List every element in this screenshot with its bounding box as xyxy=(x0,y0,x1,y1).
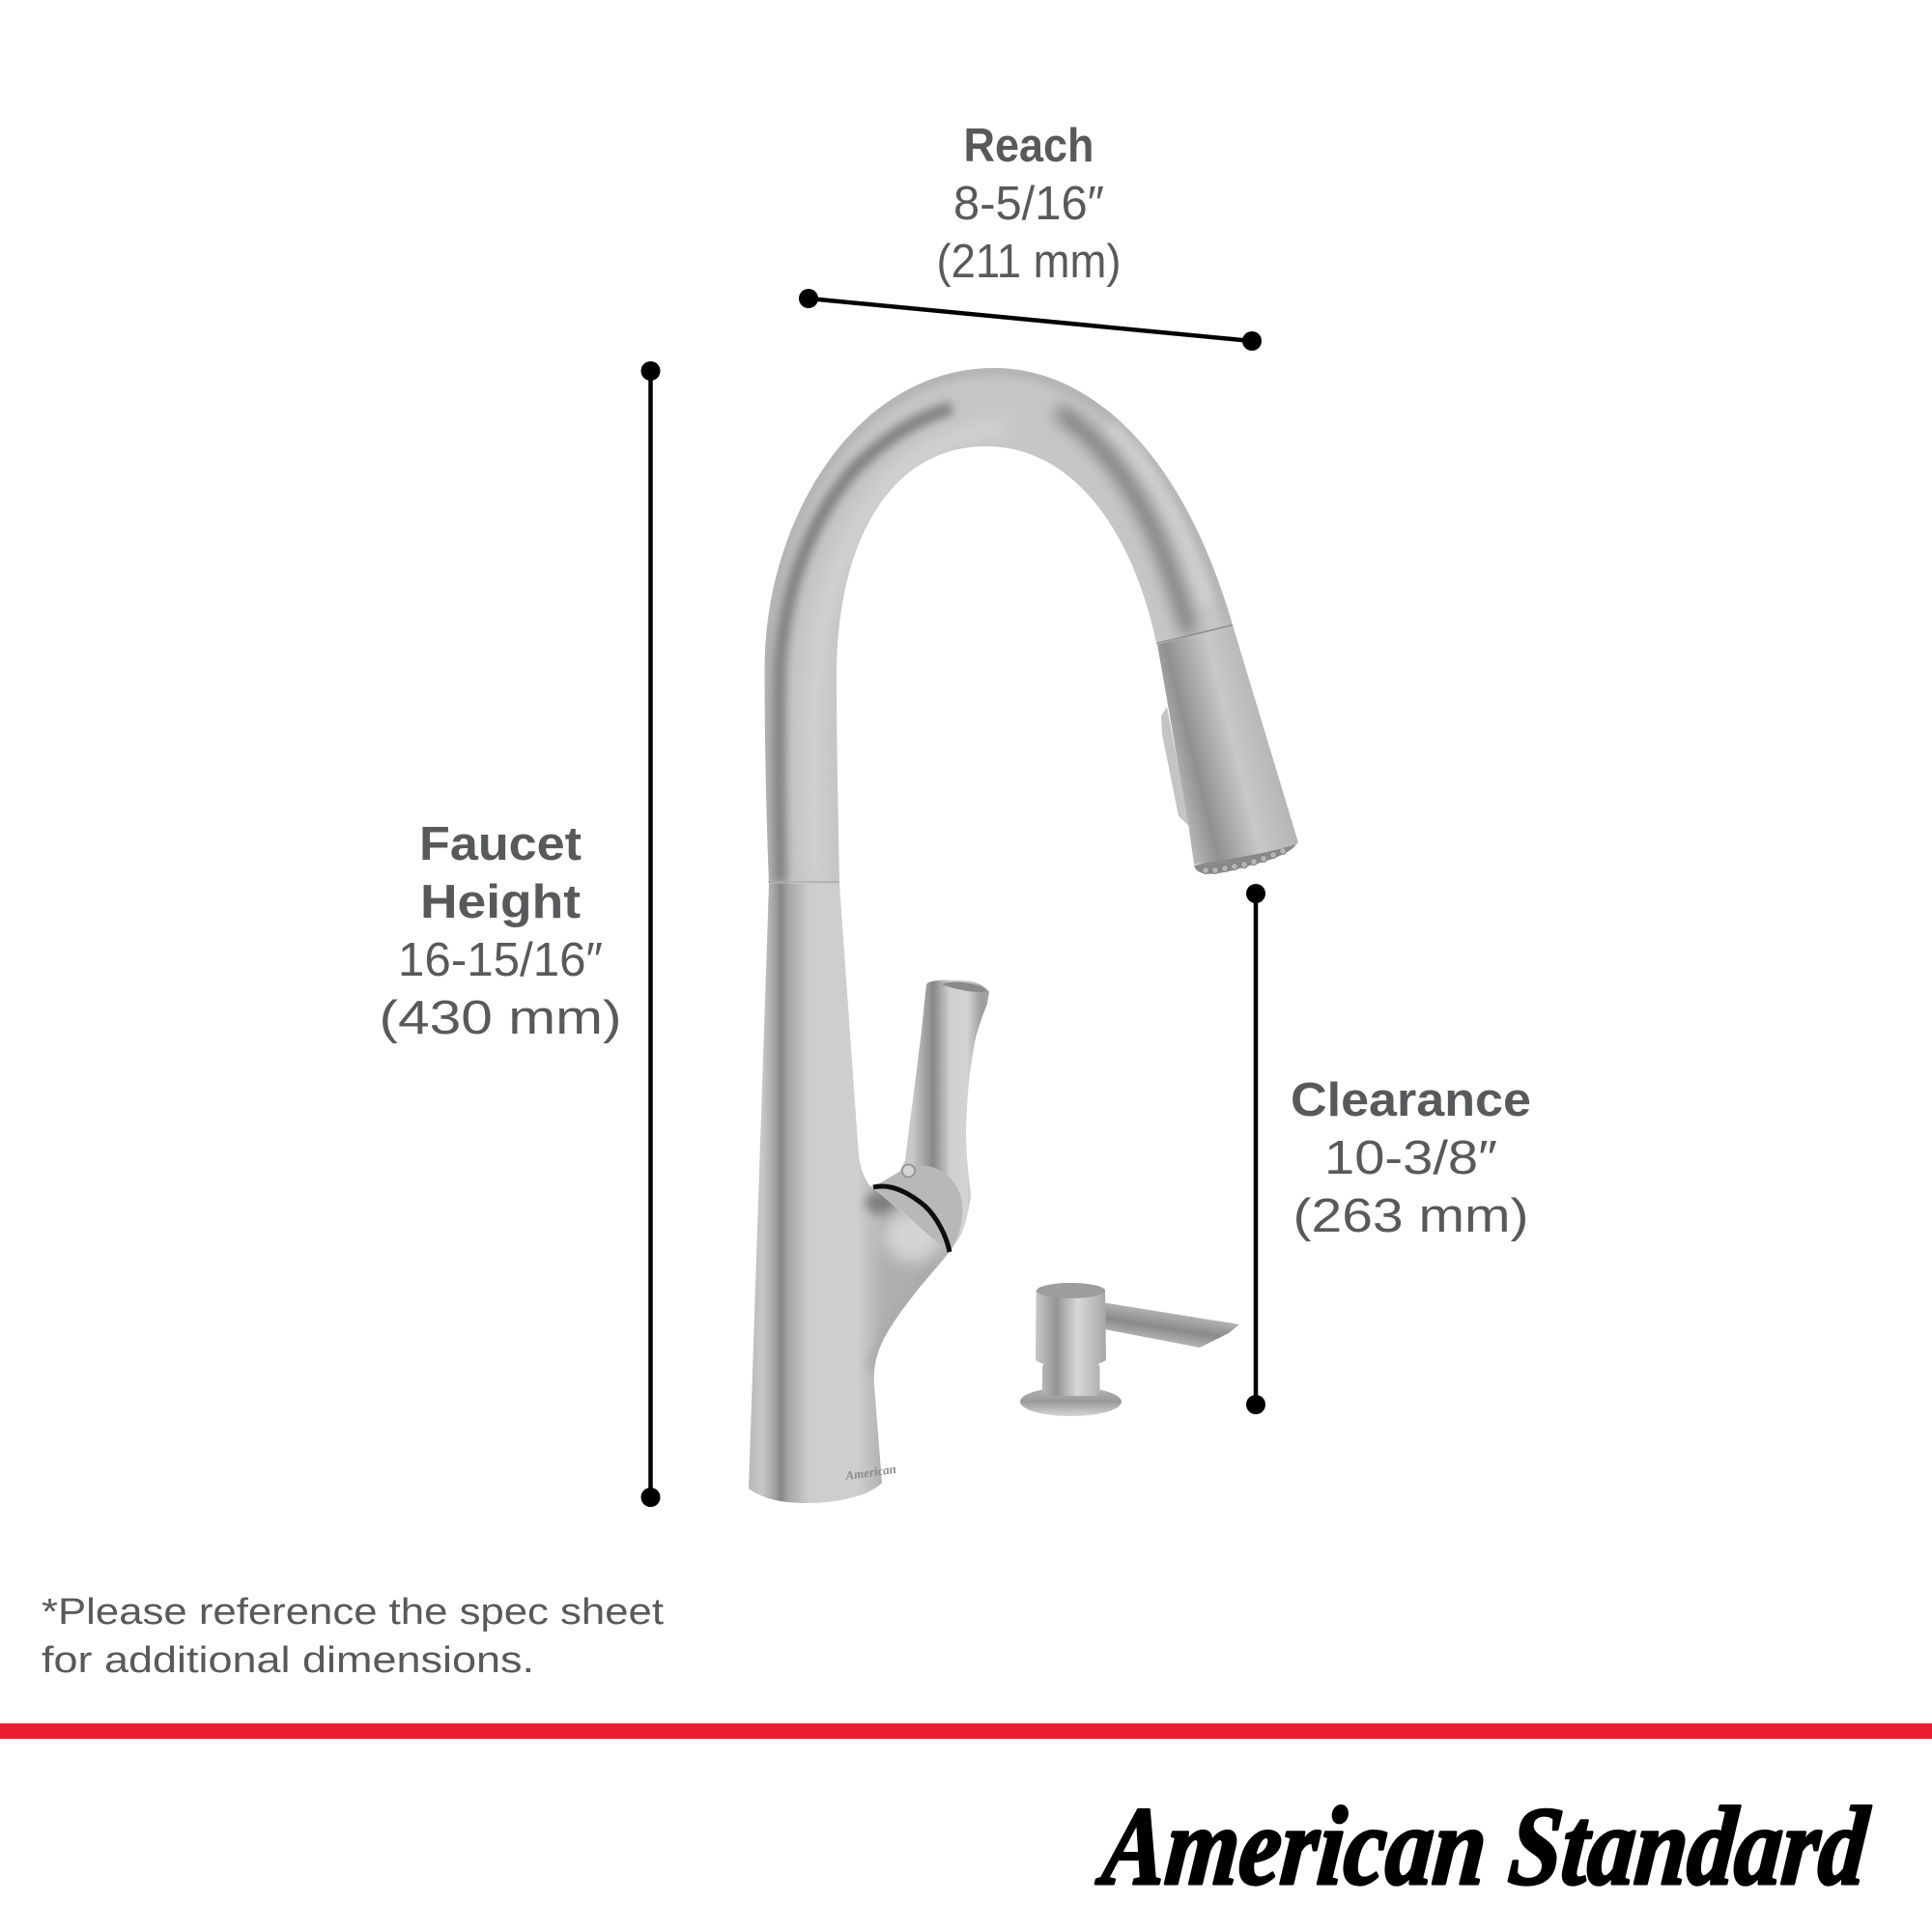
clearance label: Clearance xyxy=(1291,1074,1531,1126)
clearance label: 10-3/8″ xyxy=(1324,1132,1497,1184)
footnote: *Please reference the spec sheet xyxy=(42,1592,665,1633)
reach label: (211 mm) xyxy=(937,236,1121,288)
soap cap xyxy=(1037,1283,1105,1298)
faucet height label: Faucet xyxy=(419,818,582,870)
reach label: Reach xyxy=(964,120,1094,172)
clearance label xyxy=(1291,1074,1531,1242)
trigger xyxy=(1161,707,1190,827)
faucet height label: Height xyxy=(420,876,581,928)
faucet logo mark: American xyxy=(843,1462,897,1483)
gooseneck spout xyxy=(765,368,1233,884)
reach label: 8-5/16″ xyxy=(953,178,1104,230)
soap base xyxy=(1020,1387,1122,1416)
handle xyxy=(872,980,989,1252)
footnote xyxy=(42,1592,665,1681)
soap neck xyxy=(1042,1362,1099,1396)
faucet height dimension line xyxy=(641,361,661,1507)
soap spout xyxy=(1089,1301,1239,1348)
footnote: for additional dimensions. xyxy=(42,1640,534,1681)
soap cylinder xyxy=(1036,1291,1106,1368)
faucet illustration xyxy=(749,368,1298,1503)
soap dispenser xyxy=(1020,1283,1239,1416)
black ring xyxy=(873,1186,950,1252)
faucet height label xyxy=(379,818,622,1044)
faucet height label: 16-15/16″ xyxy=(398,934,603,986)
faucet height label: (430 mm) xyxy=(379,992,622,1044)
clearance dimension line xyxy=(1246,884,1265,1414)
spray head xyxy=(1156,625,1298,874)
reach label xyxy=(937,120,1121,288)
nozzle xyxy=(1194,840,1297,874)
reach dimension line xyxy=(799,289,1262,351)
red divider bar xyxy=(0,1723,1932,1739)
faucet body xyxy=(749,882,950,1503)
clearance label: (263 mm) xyxy=(1293,1190,1528,1242)
